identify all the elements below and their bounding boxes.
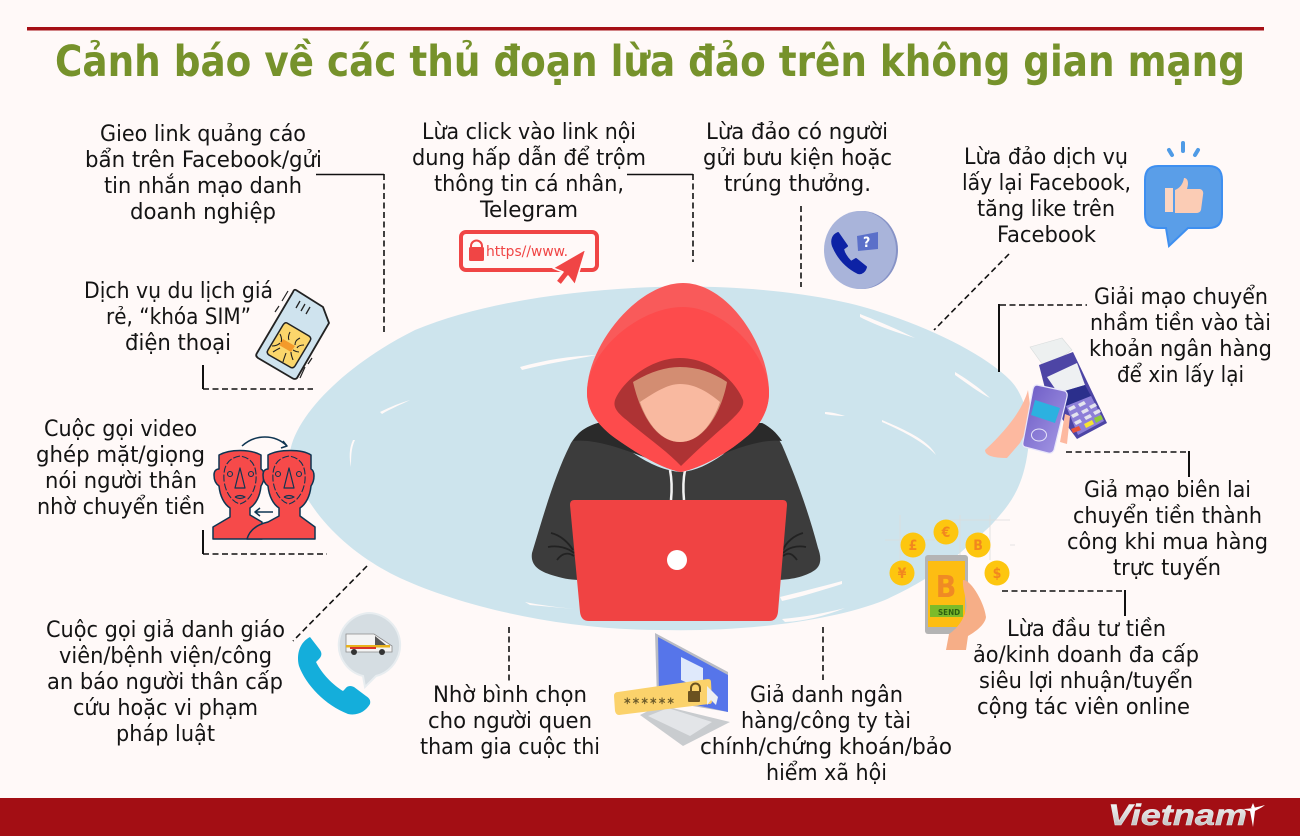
text: đầu tư tiền ảo: cộng tác viên online xyxy=(977,695,1190,720)
icon: SIM card xyxy=(256,290,329,379)
text: bình chọn xyxy=(420,683,600,760)
icon: two face-scan heads xyxy=(213,437,315,539)
text: giả danh ngân hàng xyxy=(700,683,952,786)
hood strings xyxy=(670,470,685,500)
text: bưu kiện xyxy=(703,120,892,197)
connector lines xyxy=(203,174,1189,682)
icon: bitcoin phone and coins: B xyxy=(973,538,983,554)
text: cuộc gọi video: Cuộc gọi video xyxy=(44,417,197,442)
text: biên lai: trực tuyến xyxy=(1113,556,1221,581)
text: biên lai xyxy=(1067,478,1268,581)
text: chuyển nhầm xyxy=(1089,285,1272,388)
text: chuyển nhầm: khoản ngân hàng xyxy=(1089,337,1272,362)
icon: payment terminal and phone xyxy=(985,338,1107,458)
text: giả danh giáo viên: viên/bệnh viện/công xyxy=(59,644,272,669)
text: đầu tư tiền ảo: Lừa đầu tư tiền xyxy=(1007,617,1166,642)
text: bưu kiện: trúng thưởng. xyxy=(724,172,871,197)
text: chuyển nhầm: nhầm tiền vào tài xyxy=(1090,311,1271,336)
hacker figure with laptop xyxy=(532,283,820,621)
text: Facebook service xyxy=(962,145,1131,248)
icon: bitcoin phone and coins xyxy=(885,515,1015,650)
text: bình chọn: tham gia cuộc thi xyxy=(420,735,600,760)
text: Gieo link: Gieo link quảng cáo xyxy=(100,122,306,147)
text: biên lai: Giả mạo biên lai xyxy=(1084,478,1251,503)
text: Facebook service: tăng like trên xyxy=(977,197,1115,222)
text: chuyển nhầm: Giải mạo chuyển xyxy=(1094,285,1268,310)
text: giả danh giáo viên: pháp luật xyxy=(116,722,215,747)
text: chuyển nhầm: để xin lấy lại xyxy=(1117,363,1244,388)
shoulder shadows xyxy=(573,423,782,472)
laptop xyxy=(570,500,787,621)
text: Gieo link: tin nhắn mạo danh xyxy=(104,174,302,199)
text: du lịch khóa SIM xyxy=(84,279,273,356)
logo: Vietnam+: Vietnam xyxy=(1108,799,1247,832)
hood opening xyxy=(614,358,743,466)
text: bình chọn: Nhờ bình chọn xyxy=(433,683,587,708)
text: giả danh ngân hàng: hiểm xã hội xyxy=(766,761,887,786)
text: Lừa click: Lừa click vào link nội xyxy=(422,120,636,145)
text: cuộc gọi video: ghép mặt/giọng xyxy=(36,443,205,468)
text: du lịch khóa SIM: rẻ, “khóa SIM” xyxy=(106,305,251,330)
footer band xyxy=(0,798,1300,836)
text: Lừa click: Telegram xyxy=(479,198,578,223)
icon: blue phone with ambulance bubble xyxy=(298,613,400,714)
text: giả danh giáo viên: cứu hoặc vi phạm xyxy=(73,696,258,721)
text: cuộc gọi video: nói người thân xyxy=(45,469,197,494)
icon: https link with cursor xyxy=(461,232,597,285)
blue brush ellipse background xyxy=(290,287,1029,630)
text: Lừa click: thông tin cá nhân, xyxy=(434,172,624,197)
title: Cảnh báo về các thủ đoạn lừa đảo trên không gian mạng xyxy=(55,37,1245,87)
text: du lịch khóa SIM: Dịch vụ du lịch giá xyxy=(84,279,273,304)
icon: bitcoin phone and coins: ¥ xyxy=(898,566,907,582)
text: bưu kiện: Lừa đảo có người xyxy=(706,120,888,145)
text: giả danh giáo viên: Cuộc gọi giả danh giáo xyxy=(46,618,285,643)
text: du lịch khóa SIM: điện thoại xyxy=(125,331,231,356)
sleeve wrinkles xyxy=(548,533,806,560)
text: biên lai: công khi mua hàng xyxy=(1067,530,1268,555)
icon: laptop with password bar: ****** xyxy=(624,696,674,712)
icon: bitcoin phone and coins: € xyxy=(941,525,950,541)
text: đầu tư tiền ảo xyxy=(973,617,1199,720)
text: Lừa click xyxy=(412,120,646,223)
laptop logo xyxy=(667,550,687,570)
text: đầu tư tiền ảo: siêu lợi nhuận/tuyển xyxy=(979,669,1193,694)
text: Gieo link xyxy=(85,122,322,225)
text: Facebook service: Lừa đảo dịch vụ xyxy=(964,145,1128,170)
text: giả danh ngân hàng: hàng/công ty tài xyxy=(741,709,911,734)
text: Facebook service: lấy lại Facebook, xyxy=(962,171,1131,196)
text: giả danh giáo viên: an báo người thân cấp xyxy=(47,670,283,695)
text: cuộc gọi video xyxy=(36,417,205,520)
text: bình chọn: cho người quen xyxy=(428,709,592,734)
hood xyxy=(587,283,769,472)
text: Lừa click: dung hấp dẫn để trộm xyxy=(412,145,646,171)
icon: bitcoin phone and coins: £ xyxy=(909,538,917,554)
top rule xyxy=(27,27,1264,30)
text: biên lai: chuyển tiền thành xyxy=(1073,504,1262,529)
text: giả danh giáo viên xyxy=(46,618,285,747)
text: giả danh ngân hàng: Giả danh ngân xyxy=(750,683,903,708)
text: bưu kiện: gửi bưu kiện hoặc xyxy=(703,146,892,171)
hood front xyxy=(587,307,769,472)
icon: bitcoin phone and coins: SEND xyxy=(938,608,960,617)
icon: thumbs up bubble xyxy=(1145,143,1222,246)
face xyxy=(633,367,727,442)
text: giả danh ngân hàng: chính/chứng khoán/bảo xyxy=(700,735,952,760)
icon: bitcoin phone and coins: $ xyxy=(993,566,1001,582)
text: cuộc gọi video: nhờ chuyển tiền xyxy=(37,495,205,520)
text: Gieo link: doanh nghiệp xyxy=(130,200,276,225)
icon: phone with question mark xyxy=(824,211,898,289)
icon: phone with question mark: ? xyxy=(863,235,870,251)
icon: laptop with password bar xyxy=(614,633,730,746)
icon: https link with cursor: https//www. xyxy=(486,244,568,260)
text: Facebook service: Facebook xyxy=(997,223,1097,248)
text: đầu tư tiền ảo: ảo/kinh doanh đa cấp xyxy=(973,643,1199,668)
icon: bitcoin phone and coins: B xyxy=(936,570,956,605)
text: Gieo link: bẩn trên Facebook/gửi xyxy=(85,148,322,173)
hoodie body xyxy=(532,423,820,580)
